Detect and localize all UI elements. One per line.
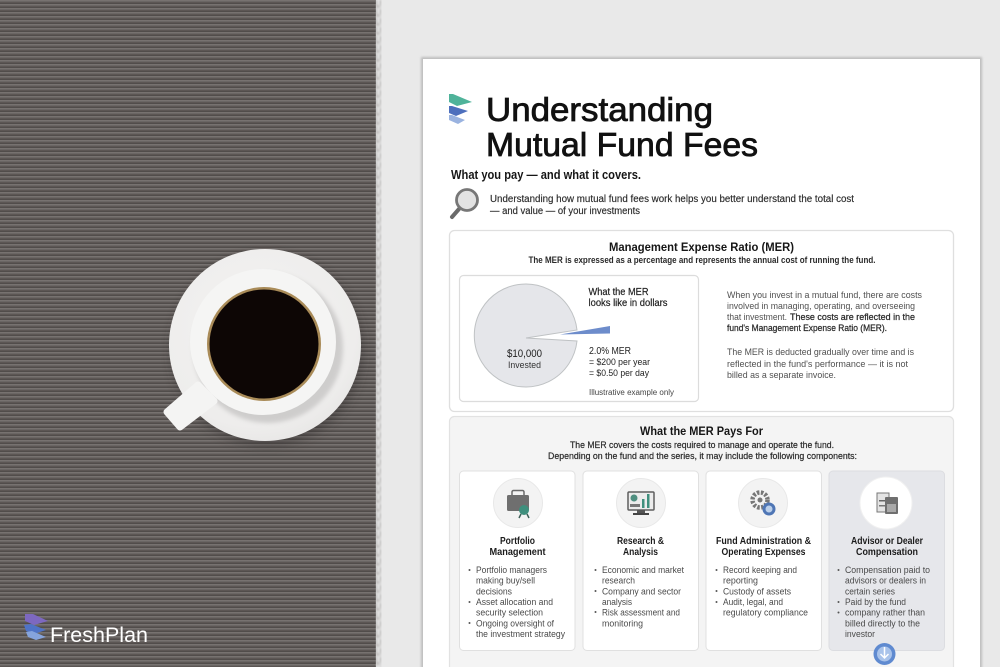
card: Advisor or Dealer Compensation (829, 471, 944, 650)
subtitle: What you pay — and what it covers. (451, 168, 641, 182)
MER values (589, 346, 650, 379)
card: Fund Administration and Operating Expenses (706, 471, 822, 650)
card bullets: security selection (476, 608, 543, 618)
section description (548, 440, 857, 461)
dollars illustration box (460, 276, 698, 402)
card heading (490, 536, 546, 558)
intro text: Understanding how mutual fund fees work helps you better understand the total cost (490, 194, 854, 205)
card bullets: certain series (845, 586, 895, 596)
dollars label: looks like in dollars (588, 298, 668, 309)
card heading: Compensation (856, 547, 918, 558)
card heading: Research & (617, 536, 664, 547)
card bullets: monitoring (602, 618, 643, 628)
icon: magnifying glass (452, 190, 478, 217)
card bullets: Paid by the fund (845, 597, 906, 607)
MER explanation: billed as a separate invoice. (727, 370, 836, 381)
MER heading: Management Expense Ratio (MER) (609, 240, 794, 254)
title: Understanding (486, 91, 713, 128)
card heading: Management (490, 547, 546, 558)
title: Mutual Fund Fees (486, 126, 758, 163)
dollars label (588, 287, 668, 309)
section heading: What the MER Pays For (640, 424, 763, 438)
title (486, 91, 758, 163)
card bullets: the investment strategy (476, 629, 565, 639)
MER explanation: that investment. (727, 312, 787, 323)
MER values: 2.0% MER (589, 346, 631, 357)
card heading: Portfolio (500, 536, 535, 547)
brand logo: FreshPlan: FreshPlan (50, 624, 148, 647)
card bullets: Company and sector (602, 586, 681, 596)
MER description: The MER is expressed as a percentage and represents the annual cost of running the fund. (528, 255, 876, 265)
card bullets: analysis (602, 597, 632, 607)
pie chart (474, 284, 610, 387)
pie chart: $10,000 (507, 348, 542, 360)
illustrative note: Illustrative example only (589, 388, 674, 397)
logo mark (449, 94, 472, 124)
card heading (617, 536, 664, 558)
MER values: = $0.50 per day (589, 368, 649, 379)
card bullets: Asset allocation and (476, 597, 553, 607)
MER explanation: The MER is deducted gradually over time and is (727, 347, 914, 358)
card bullets: reporting (723, 576, 758, 586)
card heading (716, 536, 811, 558)
MER explanation: involved in managing, operating, and overseeing (727, 301, 915, 312)
card heading: Operating Expenses (722, 547, 806, 558)
section description: The MER covers the costs required to manage and operate the fund. (570, 440, 834, 450)
dollars label: What the MER (588, 287, 648, 298)
card heading: Fund Administration & (716, 536, 811, 547)
card bullets: company rather than (845, 608, 925, 618)
card bullets: regulatory compliance (723, 608, 808, 618)
cup handle (167, 385, 214, 427)
card bullets: Ongoing oversight of (476, 618, 554, 628)
card bullets: Economic and market (602, 565, 684, 575)
card bullets (594, 565, 684, 628)
intro text (490, 194, 854, 217)
panel: What the MER Pays For (450, 416, 954, 667)
card: Research and Analysis (583, 471, 698, 650)
cup body (190, 269, 336, 415)
brand logo: FreshPlan (24, 614, 148, 647)
card bullets (468, 565, 565, 639)
card heading: Advisor or Dealer (851, 536, 923, 547)
intro text: — and value — of your investments (490, 206, 640, 217)
card: Portfolio Management (460, 471, 575, 650)
card heading: Analysis (623, 547, 658, 558)
icon: briefcase (494, 478, 542, 528)
icon: down arrow badge (874, 643, 896, 665)
card bullets: Risk assessment and (602, 608, 680, 618)
card bullets: investor (845, 629, 875, 639)
pie chart: Invested (508, 360, 541, 370)
saucer (169, 249, 361, 441)
card bullets: advisors or dealers in (845, 576, 926, 586)
card bullets: Portfolio managers (476, 565, 547, 575)
card bullets: making buy/sell (476, 576, 535, 586)
MER explanation (727, 290, 922, 381)
icon: calculator and math sheet (860, 477, 912, 529)
card bullets: billed directly to the (845, 618, 920, 628)
card bullets: decisions (476, 586, 512, 596)
MER explanation: When you invest in a mutual fund, there are costs (727, 290, 922, 301)
card bullets (838, 565, 930, 639)
card bullets (716, 565, 808, 618)
paper sheet (421, 57, 982, 667)
panel: Management Expense Ratio (450, 230, 954, 412)
MER explanation: These costs are reflected in the (790, 312, 915, 323)
section description: Depending on the fund and the series, it may include the following components: (548, 451, 857, 461)
MER explanation: reflected in the fund's performance — it is not (727, 359, 908, 370)
MER explanation: fund's Management Expense Ratio (MER). (727, 323, 887, 334)
coffee (207, 287, 321, 401)
coffee cup on saucer (167, 249, 363, 446)
icon: gears (738, 478, 788, 528)
card bullets: Audit, legal, and (723, 597, 783, 607)
card bullets: research (602, 576, 635, 586)
icon: monitor with charts (616, 478, 666, 528)
background: woven placemat (0, 0, 381, 667)
card bullets: Custody of assets (723, 586, 791, 596)
card bullets: Compensation paid to (845, 565, 930, 575)
MER values: = $200 per year (589, 357, 650, 368)
card bullets: Record keeping and (723, 565, 797, 575)
card heading (851, 536, 923, 558)
